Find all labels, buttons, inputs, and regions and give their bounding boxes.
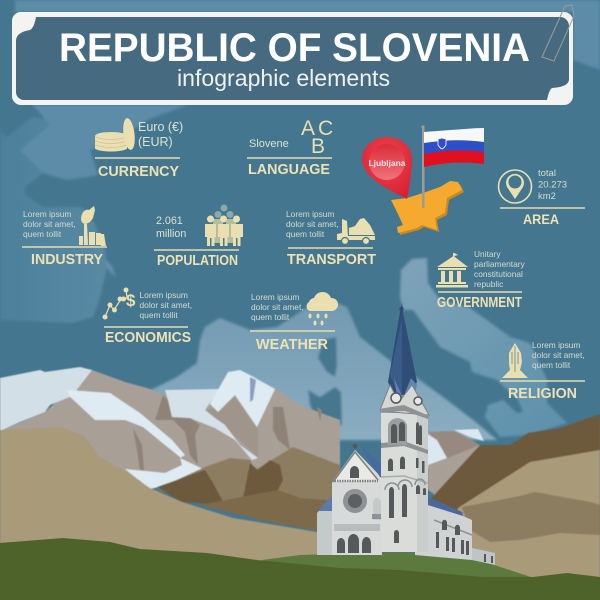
map pin: Ljubljana — [368, 158, 406, 168]
panel: area: 20.273 — [538, 180, 567, 190]
icon: location — [498, 170, 532, 203]
panel: industry: dolor sit amet, — [23, 219, 76, 229]
panel: population: million — [156, 228, 186, 240]
panel: weather — [250, 292, 338, 353]
panel: currency: Euro (€) — [138, 120, 183, 134]
panel: economics — [102, 288, 192, 346]
panel: economics: quem tollit — [140, 310, 178, 320]
panel: area: AREA — [523, 212, 559, 227]
panel: language: LANGUAGE — [248, 162, 330, 178]
icon: truck — [337, 218, 375, 244]
brown mountains — [157, 447, 340, 530]
panel: population: 2.061 — [156, 215, 183, 227]
panel: weather: Lorem ipsum — [251, 292, 299, 302]
mountains — [0, 367, 600, 590]
spire — [388, 303, 417, 395]
left wing — [317, 497, 332, 555]
panel: language — [247, 117, 333, 178]
panel: transport — [286, 209, 376, 268]
panel: weather: WEATHER — [256, 337, 329, 353]
panel: government: republic — [474, 279, 503, 289]
side nave — [415, 495, 472, 560]
panel: government: constitutional — [474, 269, 523, 279]
icon: factory — [79, 206, 106, 246]
icon: letters: B — [311, 135, 325, 158]
panel: weather: dolor sit amet, — [251, 302, 304, 312]
icon: rain cloud — [307, 292, 338, 326]
panel: government: parliamentary — [474, 259, 526, 269]
subtitle: infographic elements — [177, 65, 390, 91]
panel: map and flag — [362, 125, 484, 235]
icon: letters: C — [318, 117, 333, 140]
panel: economics: dolor sit amet, — [140, 300, 192, 310]
panel: population — [154, 204, 243, 269]
panel: economics: ECONOMICS — [105, 330, 191, 346]
tan foreground — [0, 427, 330, 570]
snow — [0, 367, 92, 431]
panel: religion: dolor sit amet, — [532, 350, 585, 360]
icon: coins — [95, 117, 136, 152]
icon: letters — [301, 117, 333, 158]
icon: pin clip — [542, 5, 574, 61]
hills — [0, 538, 600, 600]
Slovenia map — [391, 181, 464, 235]
panel: weather: quem tollit — [251, 312, 290, 322]
icon: praying hands — [502, 343, 528, 378]
panel: industry: Lorem ipsum — [23, 209, 71, 219]
panel: religion — [500, 340, 585, 402]
panel: population: POPULATION — [157, 253, 238, 269]
panel: currency: CURRENCY — [98, 164, 179, 180]
panel: transport: TRANSPORT — [287, 252, 376, 268]
grey mountain — [0, 370, 340, 480]
icon: chart and dollar: $ — [126, 291, 136, 310]
panel: government: GOVERNMENT — [437, 295, 522, 311]
nave front — [332, 450, 382, 555]
title banner — [12, 5, 574, 105]
far right mountains — [428, 431, 480, 470]
panel: transport: quem tollit — [286, 229, 325, 239]
icon: people — [205, 204, 243, 246]
panel: religion: quem tollit — [532, 360, 571, 370]
nave windows — [423, 508, 493, 563]
icon: temple — [436, 253, 468, 288]
panel: transport: Lorem ipsum — [286, 209, 334, 219]
panel: area: km2 — [538, 191, 556, 202]
title: REPUBLIC OF SLOVENIA — [59, 26, 530, 70]
panel: industry: quem tollit — [23, 229, 62, 239]
church — [317, 303, 495, 565]
panel: area — [498, 168, 585, 227]
panel: industry: INDUSTRY — [31, 252, 103, 268]
panel: industry — [22, 206, 107, 268]
panel: currency — [95, 117, 183, 180]
panel: religion: RELIGION — [508, 386, 577, 402]
panel: area: total — [538, 168, 556, 179]
panel: currency: (EUR) — [138, 135, 173, 149]
icon: letters: A — [301, 117, 315, 140]
panel: economics: Lorem ipsum — [140, 290, 188, 300]
tower — [381, 413, 428, 552]
panel: religion: Lorem ipsum — [532, 340, 580, 350]
panel: government: Unitary — [474, 249, 501, 259]
flag — [421, 125, 484, 208]
panel: transport: dolor sit amet, — [286, 219, 339, 229]
tower windows — [388, 418, 407, 445]
panel: language: Slovene — [249, 138, 289, 150]
panel: government — [436, 249, 526, 311]
